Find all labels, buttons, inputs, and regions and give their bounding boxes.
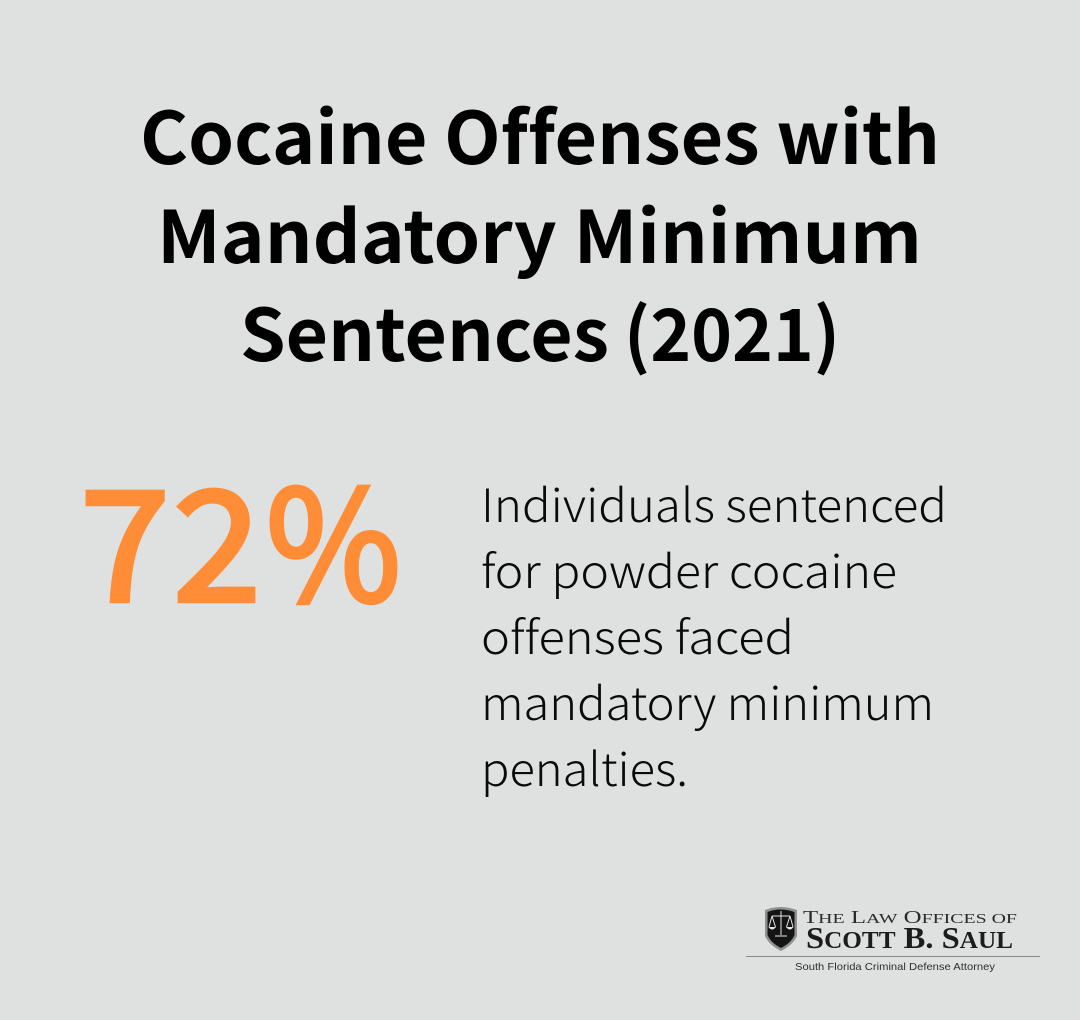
title: (2021) <box>624 277 840 382</box>
title: Mandatory Minimum <box>157 179 922 284</box>
description text: offenses faced <box>481 602 794 668</box>
logo line: The Law Offices of: T HE L AW O FFICES OF <box>803 907 1017 927</box>
description text: mandatory minimum <box>481 668 934 734</box>
logo: The Law Offices of Scott B. Saul <box>746 907 1040 973</box>
big statistic: 72%: % <box>266 425 401 646</box>
description text: for powder cocaine <box>481 536 897 602</box>
title <box>140 80 940 382</box>
description text <box>481 470 947 800</box>
logo divider <box>746 956 1040 957</box>
icon: shield with scales <box>765 907 797 951</box>
description text: penalties. <box>481 734 688 800</box>
big statistic: 72%: 7 <box>80 425 170 646</box>
big statistic: 72% <box>80 425 401 646</box>
description text: Individuals sentenced <box>481 470 947 536</box>
logo tagline: South Florida Criminal Defense Attorney <box>795 961 996 973</box>
title: Sentences <box>240 277 609 382</box>
logo line: Scott B. Saul: SCOTT B. SAUL <box>806 920 1013 955</box>
big statistic: 72%: 2 <box>173 425 261 646</box>
title: Cocaine Offenses with <box>140 80 940 185</box>
